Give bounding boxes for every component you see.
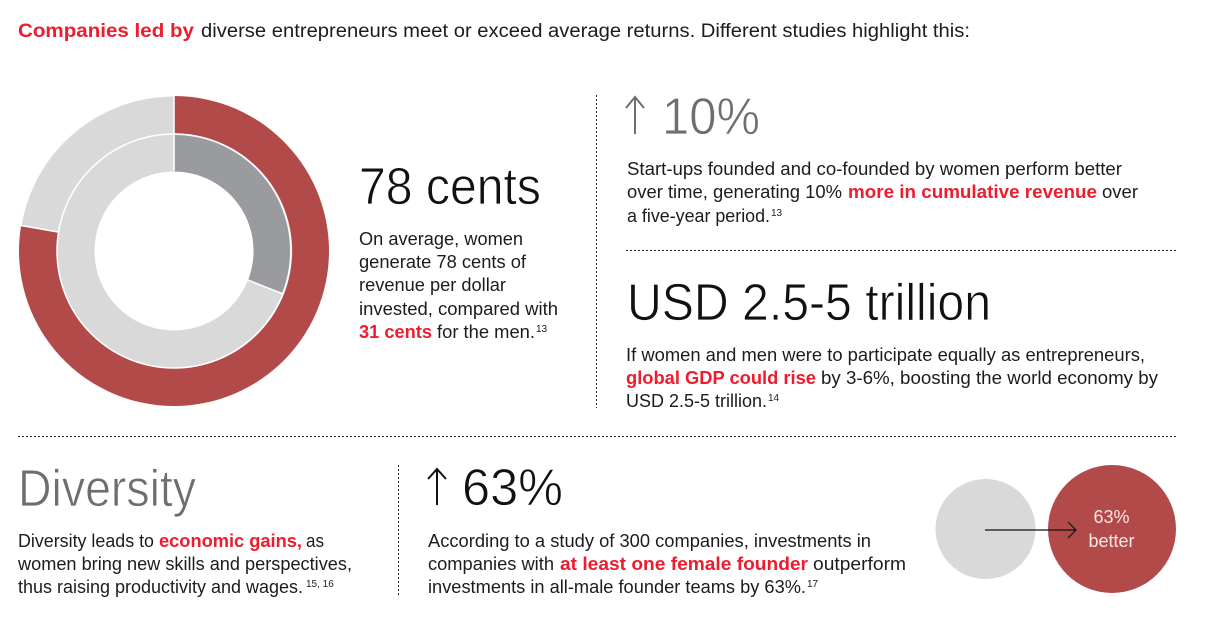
- text block: 63% description: companies with: [428, 554, 554, 574]
- text block: 63% description: at least one female founder: [560, 554, 808, 574]
- stat: USD 2.5-5 trillion: [626, 274, 1158, 411]
- text block: diversity description: as: [306, 531, 324, 551]
- text block: 78 cents description: On average, women: [359, 229, 523, 249]
- text block: diversity description: [17, 531, 352, 597]
- text block: 63% description: outperform: [813, 554, 906, 574]
- icon: up arrow: [428, 469, 446, 505]
- text block: GDP description: global GDP could rise: [626, 368, 816, 388]
- text block: 10% description: 13: [771, 208, 783, 219]
- text block: 10% description: [627, 159, 1138, 226]
- icon: up arrow: [626, 97, 644, 134]
- text block: 10% description: over: [1102, 182, 1138, 202]
- text block: diversity description: thus raising productivity and wages.: [18, 577, 303, 597]
- label: 63% better: 63%: [1093, 507, 1130, 527]
- heading: USD 2.5-5 trillion: USD 2.5-5 trillion: [627, 274, 991, 332]
- text block: 63% description: investments in all-male founder teams by 63%.: [428, 577, 806, 597]
- text block: 78 cents description: [359, 229, 558, 342]
- text block: 78 cents description: for the men.: [437, 322, 535, 342]
- title: diverse entrepreneurs meet or exceed average returns. Different studies highlight this:: [201, 21, 970, 42]
- text block: GDP description: USD 2.5-5 trillion.: [626, 391, 767, 411]
- grey circle: [936, 479, 1036, 579]
- heading: 10%: 10%: [662, 88, 760, 146]
- text block: GDP description: by 3-6%, boosting the world economy by: [821, 368, 1158, 388]
- text block: diversity description: economic gains,: [159, 531, 302, 551]
- text block: 63% description: 17: [807, 579, 819, 590]
- text block: diversity description: Diversity leads to: [18, 531, 154, 551]
- red circle: [1048, 465, 1176, 593]
- text block: 78 cents description: invested, compared with: [359, 299, 558, 319]
- text block: 10% description: over time, generating 10%: [627, 182, 842, 202]
- stat: up 63%: [428, 459, 906, 597]
- text block: 63% description: According to a study of 300 companies, investments in: [428, 531, 871, 551]
- text block: GDP description: [626, 345, 1158, 411]
- heading: Diversity: Diversity: [18, 460, 196, 518]
- text block: 10% description: Start-ups founded and co-founded by women perform better: [627, 159, 1122, 179]
- text block: diversity description: women bring new skills and perspectives,: [17, 554, 352, 574]
- text block: GDP description: If women and men were to participate equally as entrepreneurs,: [626, 345, 1145, 365]
- text block: 78 cents description: revenue per dollar: [359, 275, 506, 295]
- stat: 78 cents: [359, 158, 558, 342]
- label: 63% better: better: [1088, 531, 1135, 551]
- heading: 78 cents: 78 cents: [359, 158, 541, 216]
- text block: 78 cents description: generate 78 cents of: [359, 252, 527, 272]
- text block: 10% description: more in cumulative revenue: [848, 182, 1097, 202]
- diagram: 63% better circles: [936, 465, 1176, 593]
- title: Companies led by: [18, 21, 194, 42]
- heading: 63%: 63%: [462, 459, 563, 517]
- text block: 78 cents description: 13: [536, 324, 548, 335]
- label: 63% better: [1088, 507, 1135, 551]
- donut chart: 78 cents vs 31 cents: [19, 96, 329, 406]
- text block: diversity description: 15, 16: [306, 579, 334, 590]
- text block: 78 cents description: 31 cents: [359, 322, 432, 342]
- text block: GDP description: 14: [768, 393, 780, 404]
- stat: up 10%: [626, 88, 1138, 226]
- text block: 63% description: [428, 531, 906, 597]
- text block: 10% description: a five-year period.: [627, 206, 770, 226]
- arrow: [985, 522, 1076, 538]
- stat: diversity: [17, 460, 352, 597]
